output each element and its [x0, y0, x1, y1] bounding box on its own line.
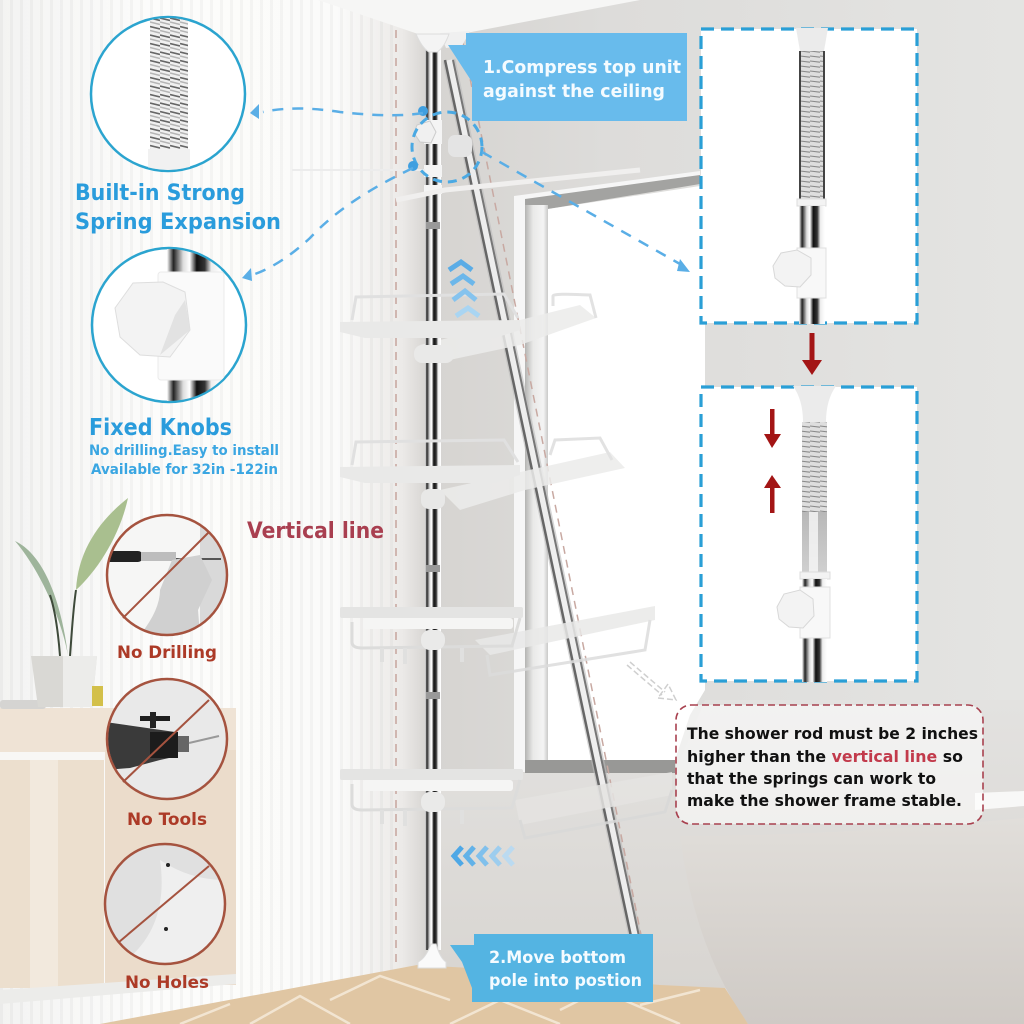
bathtub	[680, 791, 1024, 1024]
vertical reference line	[395, 30, 397, 962]
no drilling label: No Drilling	[117, 643, 217, 663]
collar	[797, 199, 826, 206]
lower rod	[802, 638, 827, 682]
rod	[799, 206, 825, 324]
bracket	[800, 587, 830, 638]
ceiling	[318, 0, 640, 37]
icon: leftward chevrons	[454, 847, 513, 865]
step 2 label: 2.Move bottom	[489, 948, 626, 968]
icon: upward chevrons	[449, 262, 479, 316]
no tools label: No Tools	[127, 810, 207, 830]
collar	[800, 572, 830, 579]
left striped wall	[0, 0, 432, 1024]
callout: vertical line note	[676, 705, 983, 824]
spring	[799, 51, 825, 199]
arrow: to knob detail	[242, 168, 413, 281]
top cap	[793, 386, 836, 422]
chrome rod	[802, 512, 827, 572]
window frame	[514, 171, 705, 773]
icon: potted plant	[15, 498, 128, 707]
knob	[777, 590, 814, 628]
bracket	[797, 248, 826, 298]
callout: vertical line note: make the shower frame stable.	[687, 791, 962, 810]
callout highlight: dashed detail circle	[408, 106, 482, 182]
callout: vertical line note: that the springs can work to	[687, 769, 936, 788]
main pole	[414, 34, 449, 968]
step 1 label	[448, 33, 687, 121]
lower wall	[440, 700, 1024, 990]
heading: knobs: Fixed Knobs	[89, 415, 232, 441]
spring edges	[800, 51, 824, 199]
white shelf wire	[292, 170, 640, 200]
bottom foot	[418, 944, 446, 968]
heading: spring: Spring Expansion	[75, 210, 281, 235]
step 2 label	[450, 934, 653, 1002]
detail circle: spring	[91, 15, 245, 179]
no holes icon	[105, 844, 225, 965]
shelf tier 2	[340, 440, 520, 509]
arrow: red down between panels	[802, 333, 822, 375]
heading: knobs: Available for 32in -122in	[91, 462, 278, 478]
shelf tier 4	[340, 769, 523, 826]
top cap	[416, 34, 449, 52]
arrow: up	[764, 475, 781, 513]
ghost shelves on tilted pole	[420, 294, 672, 838]
arrow: to spring detail	[250, 104, 423, 119]
heading: spring: Built-in Strong	[75, 181, 245, 206]
shelf tier 3	[340, 607, 523, 664]
step 1 label: 1.Compress top unit	[483, 58, 681, 78]
arrow: to right detail panels	[482, 152, 690, 272]
step 2 label: pole into postion	[489, 971, 642, 991]
no holes label: No Holes	[125, 973, 209, 993]
arrow: down	[764, 409, 781, 448]
wood floor	[100, 965, 748, 1024]
knob	[773, 250, 811, 287]
top cap	[796, 28, 828, 51]
step 1 label: against the ceiling	[483, 82, 665, 102]
heading: knobs: No drilling.Easy to install	[89, 443, 279, 459]
callout: vertical line note: The shower rod must be 2 inches	[687, 724, 978, 743]
no drilling icon	[105, 515, 230, 635]
detail circle: knob	[92, 245, 246, 405]
tilted pole ghost position	[440, 31, 646, 960]
shelf tier 1	[340, 294, 520, 363]
callout: vertical line note: higher than the vertical line so	[687, 747, 963, 766]
knob illustration	[115, 245, 224, 405]
upper knob	[414, 121, 436, 143]
ghost direction arrow	[627, 662, 676, 700]
spring	[148, 15, 190, 179]
vertical line label: Vertical line	[247, 519, 384, 544]
detail panel: after compression	[701, 386, 917, 682]
detail panel: before compression	[701, 28, 917, 324]
no tools icon	[105, 679, 227, 799]
heading: spring	[75, 181, 281, 235]
cabinet	[0, 700, 236, 1004]
heading: knobs	[89, 415, 279, 478]
spring	[802, 422, 827, 512]
